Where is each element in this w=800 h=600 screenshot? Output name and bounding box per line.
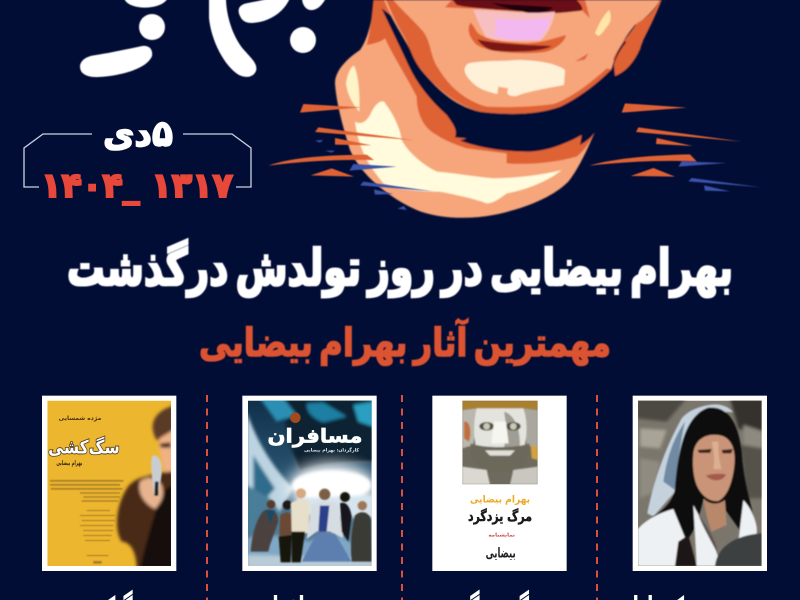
face [693, 435, 735, 501]
neck highlight [346, 66, 359, 112]
badge bracket [24, 134, 251, 187]
scarf [647, 404, 733, 517]
film still: Ballad of Tara [633, 396, 767, 571]
mouth lips [445, 0, 590, 18]
poster: Sag-Koshi [42, 396, 176, 571]
poster title: سگ‌کشی [48, 435, 120, 458]
poster credit: کارگردان: بهرام بیضایی [304, 446, 359, 453]
name lettering: white calligraphic strokes [80, 0, 326, 77]
poster small text: مژده شمسایی [59, 415, 102, 422]
poster: Marg-e Yazdgerd [432, 396, 567, 571]
neck [335, 0, 594, 218]
lower lip pink [473, 10, 555, 41]
dark under-chin shadow [382, 8, 660, 152]
face [384, 0, 660, 114]
clothing [638, 509, 687, 566]
under lip shadow [469, 23, 566, 53]
poster: Sag-Koshi: بهرام بیضایی [56, 459, 82, 467]
portrait: illustrated chin and neck [335, 0, 662, 218]
chin highlight [465, 60, 565, 96]
book genre: نمایشنامه [488, 533, 515, 539]
portrait: speed streaks [268, 103, 762, 210]
date text: ۵دی [103, 114, 173, 155]
hair [652, 406, 753, 538]
book title: مرگ یزدگرد [468, 508, 532, 525]
poster: Mosaferan [242, 396, 377, 571]
travellers [251, 488, 372, 562]
years text: ۱۴۰۴_ ۱۳۱۷ [41, 166, 233, 206]
dashed dividers [207, 395, 597, 600]
jaw orange shading right [613, 0, 662, 76]
subtitle: مهمترین آثار بهرام بیضایی [199, 318, 611, 366]
date badge [24, 114, 251, 206]
woman with gun [117, 406, 173, 568]
neck shadow orange [367, 0, 594, 164]
book author: بهرام بیضایی [470, 494, 530, 505]
book signature: بیضایی [486, 546, 516, 562]
poster title: مسافران [267, 424, 362, 447]
cheek highlight [595, 10, 611, 36]
jaw orange shading left [386, 0, 612, 114]
neck light band [355, 101, 562, 203]
